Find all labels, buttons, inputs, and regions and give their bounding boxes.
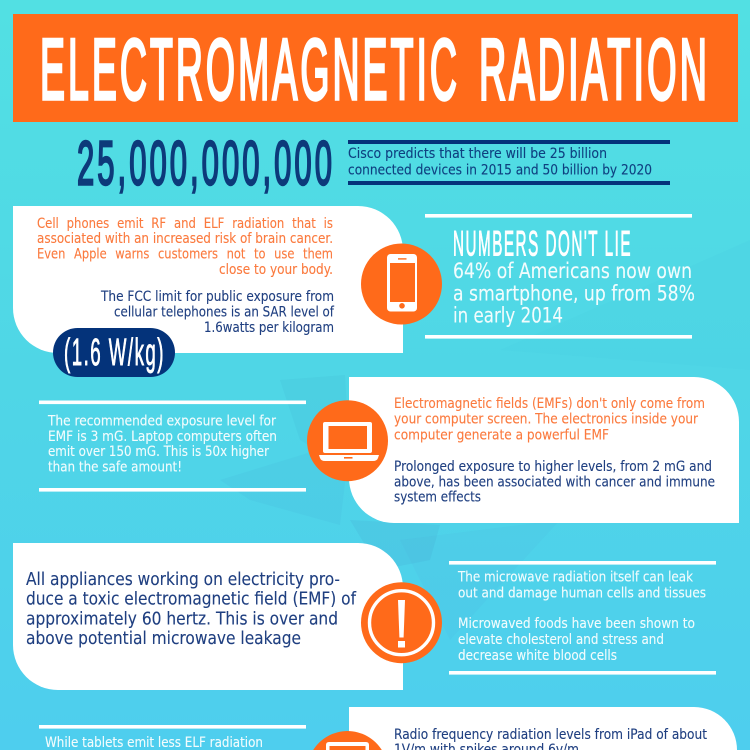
exposure text: than the safe amount! — [48, 460, 182, 476]
microwave text — [457, 570, 706, 664]
FCC limit text: The FCC limit for public exposure from — [100, 289, 334, 305]
Cisco prediction text: Cisco predicts that there will be 25 billion — [348, 146, 607, 162]
EMF source text: your computer screen. The electronics inside your — [394, 412, 698, 428]
appliance EMF text: above potential microwave leakage — [26, 628, 301, 649]
prolonged exposure text: system effects — [394, 490, 481, 506]
appliance EMF text — [26, 569, 357, 649]
FCC limit text: cellular telephones is an SAR level of — [114, 304, 335, 320]
exposure text — [47, 414, 277, 476]
phone radiation warning text: associated with an increased risk of brain cancer. — [37, 231, 333, 247]
smartphone ownership text: in early 2014 — [453, 304, 563, 328]
exposure text: EMF is 3 mG. Laptop computers often — [48, 429, 277, 445]
prolonged exposure text: Prolonged exposure to higher levels, from 2 mG and — [394, 459, 712, 475]
callout: tablets — [39, 725, 306, 750]
iPad radiation text — [394, 727, 707, 750]
appliance EMF text: duce a toxic electromagnetic field (EMF) of — [26, 588, 357, 610]
SAR level pill: (1.6 W/kg) — [64, 332, 165, 374]
microwave text: out and damage human cells and tissues — [458, 586, 706, 602]
appliance EMF text: All appliances working on electricity pro- — [26, 569, 340, 590]
microwave text: decrease white blood cells — [458, 648, 617, 664]
phone radiation warning text: close to your body. — [219, 262, 333, 278]
panel: tablets — [349, 707, 737, 750]
prolonged exposure text — [394, 459, 715, 506]
Cisco prediction text: connected devices in 2015 and 50 billion by 2020 — [348, 162, 652, 178]
microwave text: elevate cholesterol and stress and — [458, 632, 664, 648]
microwave text: Microwaved foods have been shown to — [458, 616, 695, 632]
microwave text: The microwave radiation itself can leak — [457, 570, 694, 586]
phone radiation warning text: Even Apple warns customers not to use them — [37, 246, 333, 262]
icon: smartphone — [361, 244, 442, 324]
EMF source text — [394, 396, 705, 444]
panel: cell phones — [13, 206, 403, 377]
exposure text: The recommended exposure level for — [47, 414, 276, 430]
smartphone ownership text: 64% of Americans now own — [453, 259, 692, 283]
icon: laptop — [307, 400, 388, 481]
FCC limit text — [100, 289, 335, 336]
EMF source text: computer generate a powerful EMF — [394, 428, 609, 444]
statistic: 25 billion devices: 25,000,000,000 — [77, 130, 335, 198]
EMF source text: Electromagnetic fields (EMFs) don't only come from — [394, 396, 705, 412]
phone radiation warning text: Cell phones emit RF and ELF radiation that is — [37, 216, 333, 232]
SAR level pill — [53, 328, 175, 377]
iPad radiation text: Radio frequency radiation levels from iPad of about — [394, 727, 707, 743]
icon: warning — [361, 582, 442, 663]
appliance EMF text: approximately 60 hertz. This is over and — [26, 608, 338, 630]
smartphone ownership text — [453, 259, 695, 328]
title banner — [13, 14, 738, 122]
panel: appliances — [13, 543, 403, 690]
FCC limit text: 1.6watts per kilogram — [204, 320, 334, 336]
callout: microwave radiation — [449, 561, 716, 675]
Cisco prediction text — [348, 146, 652, 178]
callout: numbers don't lie — [425, 214, 695, 339]
smartphone ownership text: a smartphone, up from 58% — [453, 282, 695, 306]
icon: tablet — [313, 731, 382, 750]
exposure text: emit over 150 mG. This is 50x higher — [48, 444, 269, 460]
callout: recommended EMF exposure — [39, 400, 306, 492]
panel: computers — [349, 377, 739, 523]
phone radiation warning text — [37, 216, 333, 278]
